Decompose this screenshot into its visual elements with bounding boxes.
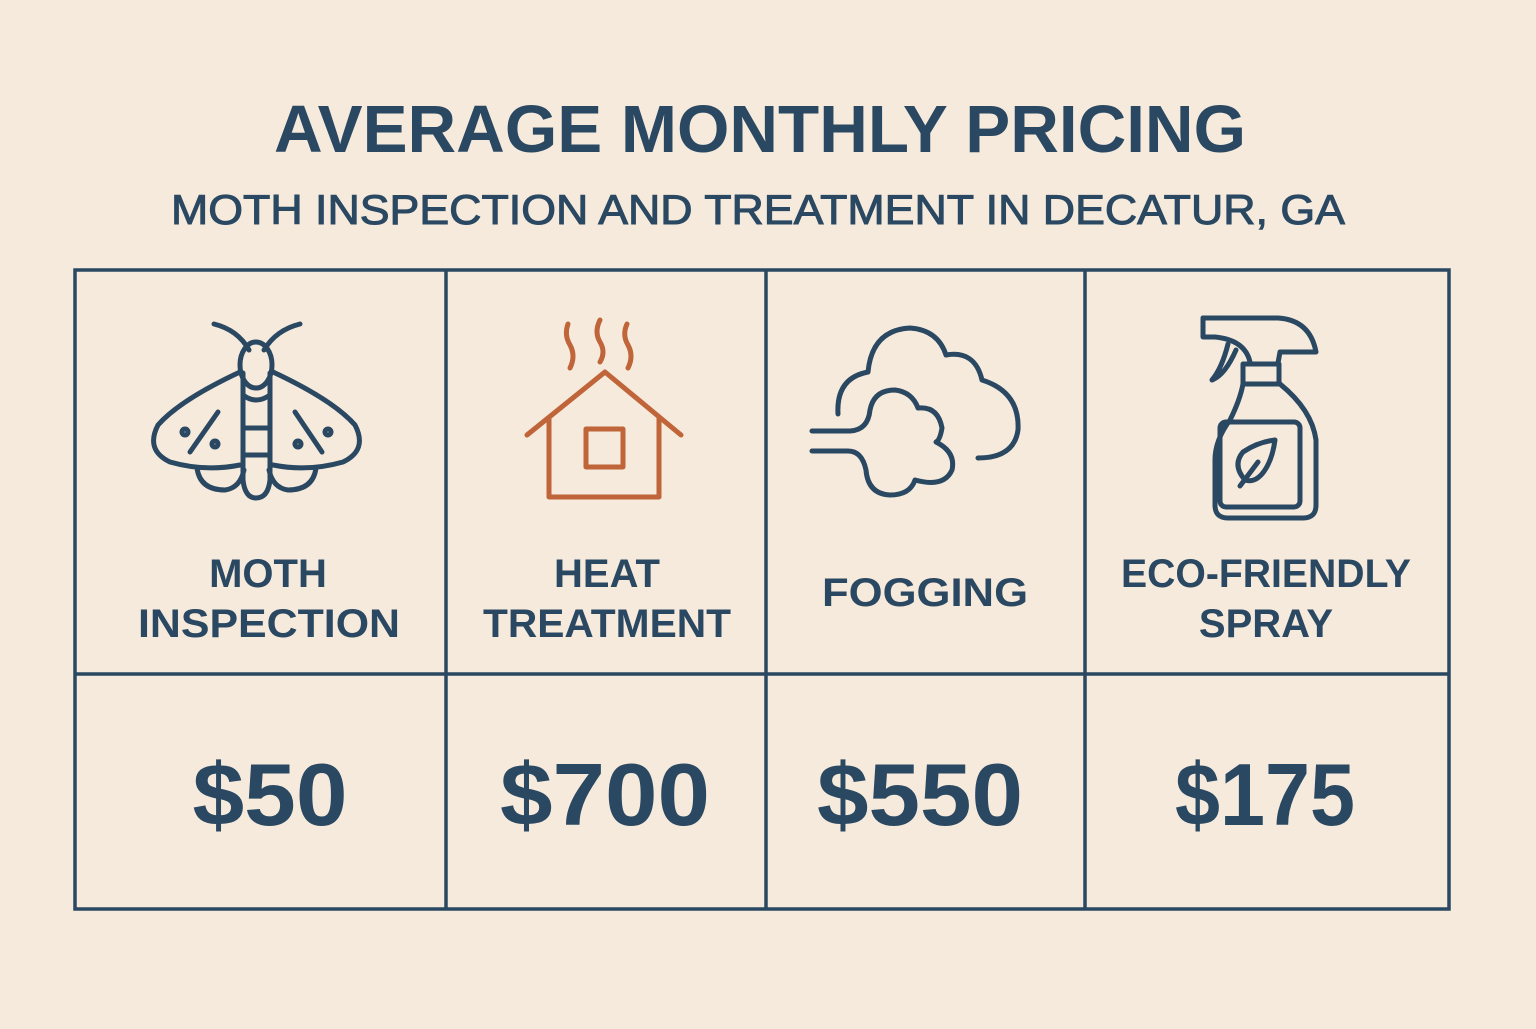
price: moth inspection: $50 (192, 745, 348, 844)
subtitle: MOTH INSPECTION AND TREATMENT IN DECATUR, GA (171, 186, 1345, 233)
icon: fog cloud (812, 328, 1018, 495)
label: eco-friendly spray: SPRAY (1199, 602, 1333, 646)
label: moth inspection (138, 552, 400, 646)
label: fogging: FOGGING (822, 571, 1028, 615)
title: AVERAGE MONTHLY PRICING (274, 92, 1246, 167)
label: heat treatment (483, 552, 731, 646)
label: eco-friendly spray (1121, 552, 1411, 646)
icon: heated house (527, 320, 681, 497)
label: heat treatment: HEAT (554, 552, 660, 596)
icon: moth (154, 324, 359, 498)
label: heat treatment: TREATMENT (483, 602, 731, 646)
icon: eco spray bottle (1203, 318, 1316, 518)
label: eco-friendly spray: ECO-FRIENDLY (1121, 552, 1411, 596)
label: moth inspection: MOTH (209, 552, 327, 596)
price: fogging: $550 (817, 745, 1023, 844)
pricing table (75, 270, 1449, 909)
price: heat treatment: $700 (500, 745, 710, 844)
label: moth inspection: INSPECTION (138, 602, 400, 646)
price: eco-friendly spray: $175 (1175, 745, 1355, 844)
